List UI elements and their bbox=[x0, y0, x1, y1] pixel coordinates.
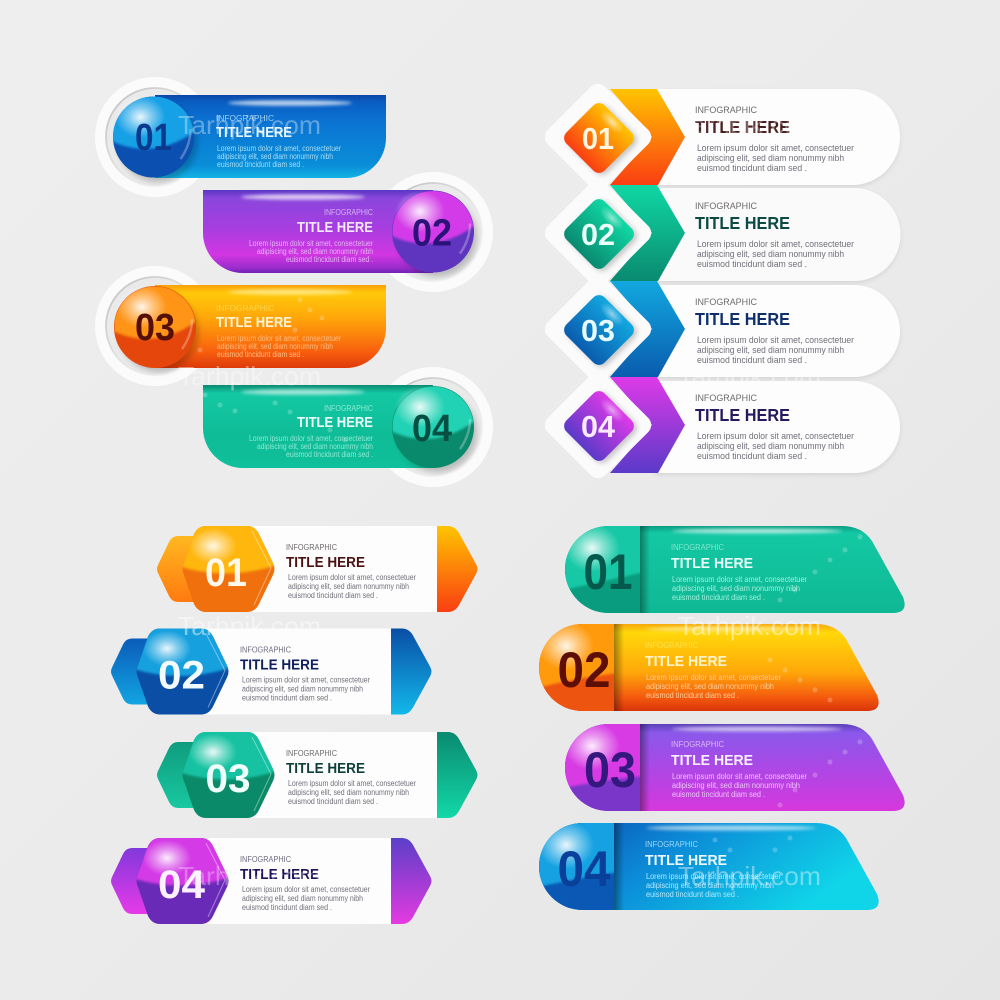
text block: euismod tincidunt diam sed . bbox=[288, 591, 378, 600]
ball 02 bbox=[391, 190, 477, 276]
back hexagon bbox=[111, 848, 169, 914]
text block: Lorem ipsum dolor sit amet, consectetuer bbox=[249, 239, 373, 248]
text block: adipiscing elit, sed diam nonummy nibh bbox=[646, 881, 774, 890]
shine bbox=[672, 727, 842, 731]
text block: euismod tincidunt diam sed . bbox=[288, 797, 378, 806]
text block: INFOGRAPHIC bbox=[695, 201, 757, 212]
text block bbox=[695, 201, 854, 270]
chevron bbox=[610, 89, 685, 185]
number 03: 03 bbox=[584, 742, 636, 798]
text block: euismod tincidunt diam sed . bbox=[242, 694, 332, 702]
hex row 04 purple bbox=[111, 834, 432, 924]
text block bbox=[216, 303, 341, 359]
shine bbox=[241, 389, 365, 395]
text block: INFOGRAPHIC bbox=[240, 854, 291, 864]
text block bbox=[249, 207, 373, 264]
back hexagon bbox=[111, 638, 169, 704]
text block: euismod tincidunt diam sed . bbox=[646, 890, 739, 899]
panel: capsule banners (bottom right) bbox=[529, 515, 905, 917]
text block: euismod tincidunt diam sed . bbox=[697, 451, 807, 462]
text block: TITLE HERE bbox=[695, 309, 790, 329]
shine bbox=[672, 529, 842, 533]
chevron bbox=[610, 281, 685, 377]
white diamond bbox=[541, 272, 655, 386]
text block: INFOGRAPHIC bbox=[240, 644, 291, 654]
text block: adipiscing elit, sed diam nonummy nibh bbox=[242, 894, 363, 903]
number 01: 01 bbox=[584, 544, 632, 600]
text block: Lorem ipsum dolor sit amet, consectetuer bbox=[217, 144, 341, 153]
text block: TITLE HERE bbox=[297, 220, 373, 236]
shine bbox=[646, 826, 816, 830]
text block: INFOGRAPHIC bbox=[286, 748, 337, 758]
divider bbox=[640, 526, 650, 613]
row 02 green bbox=[541, 176, 900, 290]
text block: Lorem ipsum dolor sit amet, consectetuer bbox=[217, 334, 341, 343]
text block: adipiscing elit, sed diam nonummy nibh bbox=[697, 441, 844, 452]
white card bbox=[240, 732, 437, 818]
ball 02: 02 bbox=[412, 212, 452, 254]
text block: Lorem ipsum dolor sit amet, consectetuer bbox=[288, 573, 416, 582]
right tab bbox=[391, 838, 432, 924]
diamond badge 03 bbox=[561, 292, 640, 370]
text block: TITLE HERE bbox=[216, 315, 292, 331]
row 01 orange bbox=[541, 80, 900, 194]
capsule body bbox=[565, 724, 905, 811]
left cap 04 bbox=[539, 823, 614, 910]
text block bbox=[216, 113, 341, 169]
right tab bbox=[437, 732, 478, 818]
text block: INFOGRAPHIC bbox=[324, 207, 373, 217]
text block: euismod tincidunt diam sed . bbox=[242, 903, 332, 912]
white diamond bbox=[541, 176, 655, 290]
text block bbox=[671, 739, 807, 799]
diamond badge 02: 02 bbox=[581, 217, 615, 252]
diamond badge 01: 01 bbox=[582, 121, 614, 156]
text block: TITLE HERE bbox=[216, 125, 292, 141]
banner 03 orange bbox=[95, 266, 386, 386]
back hexagon bbox=[157, 742, 215, 808]
watermarks: Tarhpik.com bbox=[178, 361, 321, 391]
text block bbox=[240, 644, 370, 702]
shine bbox=[228, 100, 352, 106]
back hexagon bbox=[157, 536, 215, 602]
text block: euismod tincidunt diam sed . bbox=[286, 255, 373, 264]
ball 03 bbox=[113, 285, 199, 372]
hex row 03 green bbox=[157, 728, 478, 818]
text block: TITLE HERE bbox=[671, 752, 753, 769]
divider bbox=[614, 624, 624, 711]
capsule 04 cyan bbox=[539, 823, 879, 910]
text block bbox=[286, 748, 416, 806]
panel: chevron and diamond banners (top right) bbox=[541, 80, 900, 482]
left cap 01 bbox=[565, 526, 640, 613]
text block: INFOGRAPHIC bbox=[645, 839, 698, 849]
white card bbox=[240, 526, 437, 612]
text block: TITLE HERE bbox=[286, 761, 365, 777]
white card bbox=[194, 628, 391, 714]
divider bbox=[640, 724, 650, 811]
text block: Lorem ipsum dolor sit amet, consectetuer bbox=[672, 575, 807, 584]
ring: white halo behind ball bbox=[95, 266, 215, 386]
bar body bbox=[155, 95, 386, 178]
front hexagon 02 bbox=[136, 628, 228, 714]
watermarks bbox=[178, 110, 821, 891]
text block: adipiscing elit, sed diam nonummy nibh bbox=[646, 682, 774, 691]
white diamond bbox=[541, 80, 655, 194]
ball 04: 04 bbox=[412, 408, 452, 450]
text block: TITLE HERE bbox=[297, 415, 373, 431]
ring: white halo behind ball bbox=[373, 172, 493, 292]
diamond badge 04 bbox=[561, 388, 640, 466]
text block: adipiscing elit, sed diam nonummy nibh bbox=[288, 582, 409, 591]
banner 04 green bbox=[203, 367, 493, 487]
white pill bbox=[655, 89, 900, 185]
text block: Lorem ipsum dolor sit amet, consectetuer bbox=[697, 143, 854, 154]
text block: Lorem ipsum dolor sit amet, consectetuer bbox=[672, 772, 807, 781]
text block bbox=[249, 403, 373, 459]
banner 02 purple bbox=[203, 172, 493, 292]
number 02: 02 bbox=[558, 642, 610, 698]
text block: Lorem ipsum dolor sit amet, consectetuer bbox=[288, 779, 416, 788]
text block: Lorem ipsum dolor sit amet, consectetuer bbox=[242, 676, 370, 684]
ball 01: 01 bbox=[135, 117, 172, 159]
white pill bbox=[655, 285, 900, 377]
shine bbox=[228, 289, 352, 295]
text block bbox=[645, 640, 781, 700]
banner 01 blue bbox=[95, 77, 386, 197]
white card bbox=[194, 838, 391, 924]
front hexagon 04 bbox=[136, 838, 228, 924]
front hexagon 03: 03 bbox=[206, 757, 250, 801]
text block: TITLE HERE bbox=[240, 658, 319, 674]
text block: adipiscing elit, sed diam nonummy nibh bbox=[672, 584, 800, 593]
bar body bbox=[203, 190, 433, 273]
ball 01 bbox=[112, 95, 198, 182]
text block bbox=[695, 297, 854, 366]
text block: INFOGRAPHIC bbox=[216, 303, 274, 313]
text block: euismod tincidunt diam sed . bbox=[697, 355, 807, 366]
text block: euismod tincidunt diam sed . bbox=[646, 691, 739, 700]
text block: TITLE HERE bbox=[695, 405, 790, 425]
front hexagon 01: 01 bbox=[205, 551, 247, 595]
ring: white halo behind ball bbox=[373, 367, 493, 487]
capsule body bbox=[539, 823, 879, 910]
text block: euismod tincidunt diam sed . bbox=[217, 350, 304, 359]
text block bbox=[695, 105, 854, 174]
text block: adipiscing elit, sed diam nonummy nibh bbox=[217, 152, 333, 161]
diamond badge 04: 04 bbox=[581, 409, 616, 444]
front hexagon 03 bbox=[182, 732, 274, 818]
text block: TITLE HERE bbox=[695, 117, 790, 137]
bar body bbox=[155, 285, 386, 368]
text block bbox=[240, 854, 370, 912]
ring: white halo behind ball bbox=[95, 77, 215, 197]
watermarks: Tarhpik.com bbox=[178, 861, 321, 891]
chevron bbox=[610, 185, 685, 281]
text block: adipiscing elit, sed diam nonummy nibh bbox=[697, 153, 844, 164]
text block: INFOGRAPHIC bbox=[216, 113, 274, 123]
text block: adipiscing elit, sed diam nonummy nibh bbox=[217, 342, 333, 351]
capsule 03 purple bbox=[565, 724, 905, 811]
text block: TITLE HERE bbox=[645, 852, 727, 869]
text block: Lorem ipsum dolor sit amet, consectetuer bbox=[646, 872, 781, 881]
text block: INFOGRAPHIC bbox=[324, 403, 373, 413]
text block: INFOGRAPHIC bbox=[695, 297, 757, 308]
diamond badge 03: 03 bbox=[581, 313, 615, 348]
number 04: 04 bbox=[558, 841, 611, 897]
white pill bbox=[655, 381, 900, 473]
text block: adipiscing elit, sed diam nonummy nibh bbox=[672, 781, 800, 790]
text block: Lorem ipsum dolor sit amet, consectetuer bbox=[697, 239, 854, 250]
text block: euismod tincidunt diam sed . bbox=[672, 790, 765, 799]
text block: Lorem ipsum dolor sit amet, consectetuer bbox=[646, 673, 781, 682]
right tab bbox=[437, 526, 478, 612]
text block: TITLE HERE bbox=[286, 555, 365, 571]
diamond badge 01 bbox=[561, 100, 640, 178]
text block: euismod tincidunt diam sed . bbox=[672, 593, 765, 602]
text block bbox=[695, 393, 854, 462]
text block: adipiscing elit, sed diam nonummy nibh bbox=[697, 249, 844, 260]
text block bbox=[671, 542, 807, 602]
text block: euismod tincidunt diam sed . bbox=[697, 163, 807, 174]
capsule 02 orange bbox=[539, 624, 879, 711]
text block: TITLE HERE bbox=[645, 653, 727, 670]
ball 04 bbox=[391, 385, 477, 472]
text block: TITLE HERE bbox=[671, 555, 753, 572]
row 04 purple bbox=[541, 368, 900, 482]
text block: INFOGRAPHIC bbox=[695, 105, 757, 116]
text block: adipiscing elit, sed diam nonummy nibh bbox=[257, 247, 373, 256]
watermarks: Tarhpik.com bbox=[178, 110, 321, 140]
front hexagon 02: 02 bbox=[158, 654, 205, 698]
watermarks: Tarhpik.com bbox=[678, 110, 821, 140]
watermarks: Tarhpik.com bbox=[178, 611, 321, 641]
capsule 01 green bbox=[565, 526, 905, 613]
white diamond bbox=[541, 368, 655, 482]
shine bbox=[646, 627, 816, 631]
panel: round ball banners (top left) bbox=[95, 77, 493, 487]
text block: adipiscing elit, sed diam nonummy nibh bbox=[288, 788, 409, 797]
capsule body bbox=[539, 624, 879, 711]
watermark dots bbox=[198, 298, 862, 852]
text block: INFOGRAPHIC bbox=[671, 542, 724, 552]
text block: INFOGRAPHIC bbox=[286, 542, 337, 552]
text block: adipiscing elit, sed diam nonummy nibh bbox=[697, 345, 844, 356]
watermarks: Tarhpik.com bbox=[678, 611, 821, 641]
left cap 02 bbox=[539, 624, 614, 711]
left cap 03 bbox=[565, 724, 640, 811]
divider bbox=[614, 823, 624, 910]
text block: TITLE HERE bbox=[695, 213, 790, 233]
text block: euismod tincidunt diam sed . bbox=[697, 259, 807, 270]
text block: Lorem ipsum dolor sit amet, consectetuer bbox=[697, 431, 854, 442]
text block: Lorem ipsum dolor sit amet, consectetuer bbox=[697, 335, 854, 346]
shine bbox=[241, 194, 365, 200]
text block: INFOGRAPHIC bbox=[695, 393, 757, 404]
front hexagon 04: 04 bbox=[158, 863, 206, 907]
chevron bbox=[610, 377, 685, 473]
front hexagon 01 bbox=[182, 526, 274, 612]
text block: Lorem ipsum dolor sit amet, consectetuer bbox=[249, 434, 373, 443]
bar body bbox=[203, 385, 433, 468]
capsule body bbox=[565, 526, 905, 613]
text block: INFOGRAPHIC bbox=[671, 739, 724, 749]
text block bbox=[286, 542, 416, 600]
text block: euismod tincidunt diam sed . bbox=[217, 160, 304, 169]
ball 03: 03 bbox=[135, 307, 175, 349]
white pill bbox=[655, 188, 900, 281]
watermarks: Tarhpik.com bbox=[678, 361, 821, 391]
text block: Lorem ipsum dolor sit amet, consectetuer bbox=[242, 885, 370, 894]
hex row 02 blue bbox=[111, 624, 432, 714]
panel: hexagon banners (bottom left) bbox=[111, 522, 478, 924]
diamond badge 02 bbox=[561, 196, 640, 274]
text block: euismod tincidunt diam sed . bbox=[286, 450, 373, 459]
text block: INFOGRAPHIC bbox=[645, 640, 698, 650]
text block: TITLE HERE bbox=[240, 867, 319, 883]
right tab bbox=[391, 628, 432, 714]
row 03 blue bbox=[541, 272, 900, 386]
text block bbox=[645, 839, 781, 899]
text block: adipiscing elit, sed diam nonummy nibh bbox=[257, 442, 373, 451]
watermarks: Tarhpik.com bbox=[678, 861, 821, 891]
text block: adipiscing elit, sed diam nonummy nibh bbox=[242, 684, 363, 694]
hex row 01 orange bbox=[157, 522, 478, 612]
